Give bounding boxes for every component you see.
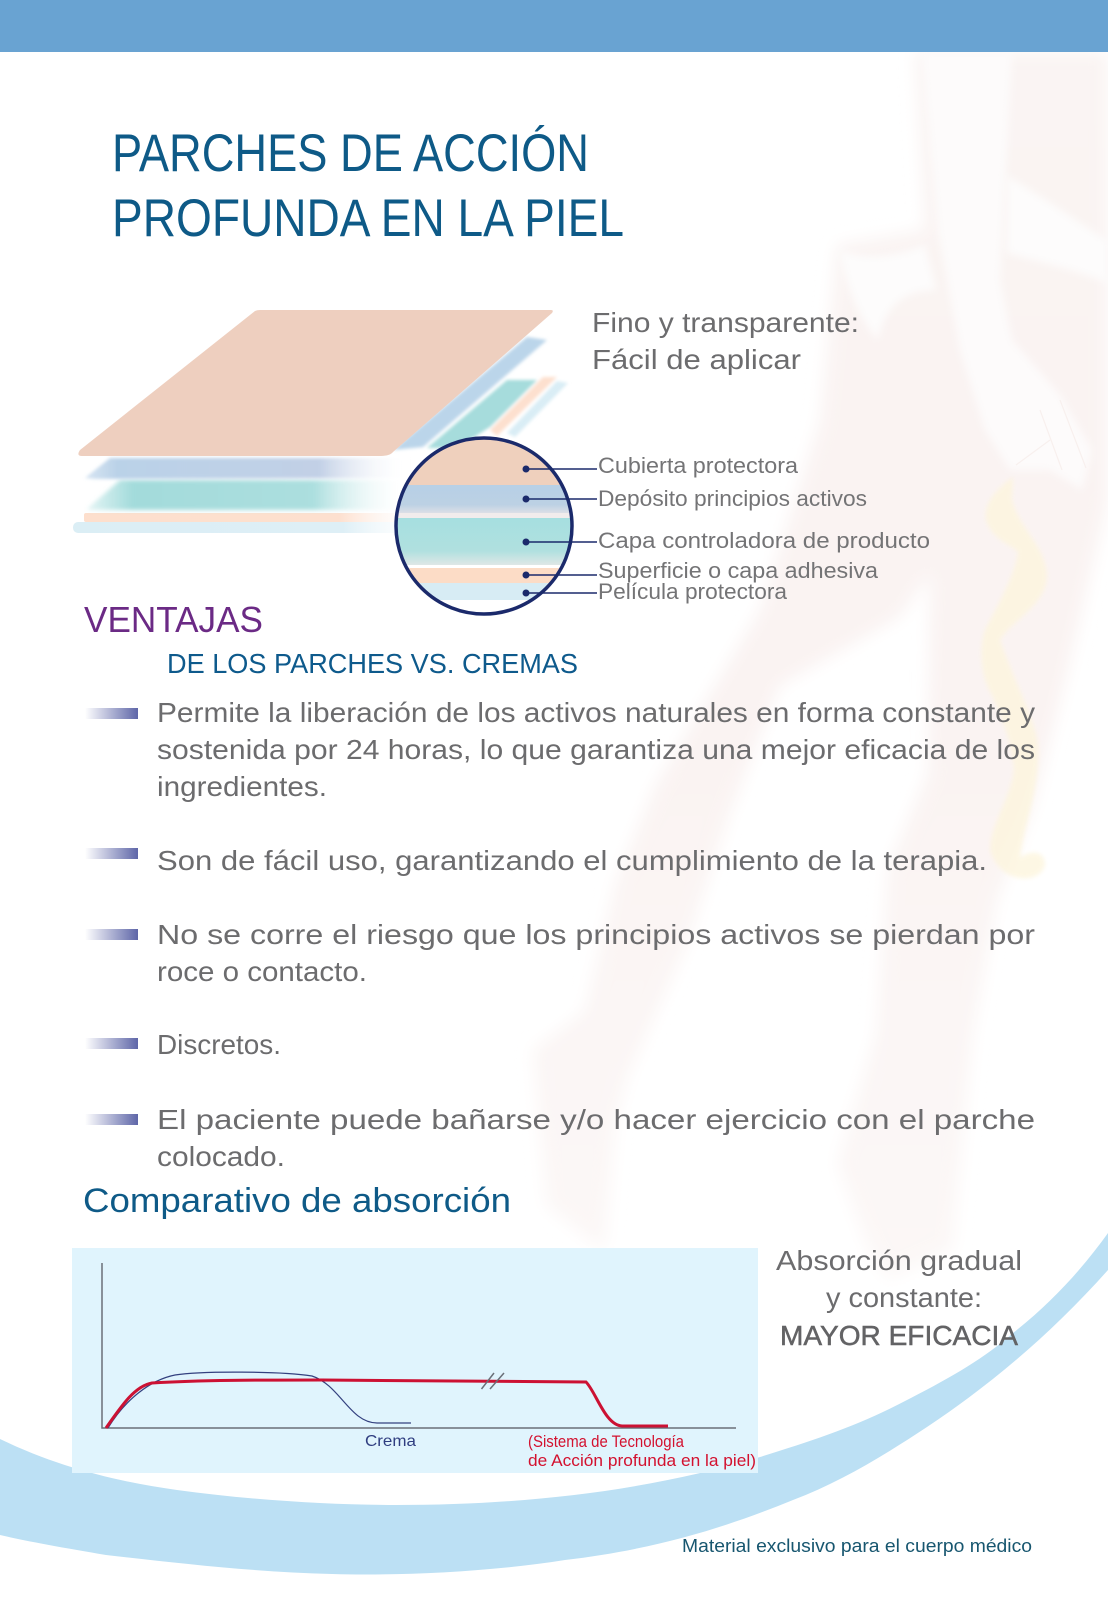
magnifier circle xyxy=(394,436,574,616)
advantage 3 xyxy=(85,919,1035,987)
light blue film layer xyxy=(73,522,433,533)
label: sistema xyxy=(528,1433,756,1470)
callout: película protectora: Película protectora xyxy=(598,579,788,604)
absorption callout: y constante: xyxy=(826,1282,982,1313)
advantage 5 xyxy=(85,1104,1035,1172)
patch feature text: Fácil de aplicar xyxy=(592,344,801,375)
advantage 5: El paciente puede bañarse y/o hacer ejercicio con el parche xyxy=(157,1104,1035,1135)
blue reservoir layer xyxy=(85,458,410,479)
diagonal edges of layers xyxy=(393,337,568,450)
background photo: faded legs xyxy=(533,52,1108,1279)
patch feature text xyxy=(592,307,859,375)
subheading: parches vs cremas: DE LOS PARCHES VS. CREMAS xyxy=(167,648,578,679)
top peach cover xyxy=(78,310,553,456)
peach adhesive layer xyxy=(84,513,424,522)
top bar xyxy=(0,0,1108,52)
callout: capa controladora: Capa controladora de producto xyxy=(598,528,930,553)
absorption callout xyxy=(776,1245,1022,1351)
underwear xyxy=(840,176,1108,340)
callout: depósito principios activos: Depósito principios activos xyxy=(598,486,867,511)
axes xyxy=(102,1263,736,1428)
patch layers illustration xyxy=(73,310,568,533)
footer note: Material exclusivo para el cuerpo médico xyxy=(682,1536,1032,1556)
title: PARCHES DE ACCIÓN xyxy=(112,124,589,183)
heading: ventajas: VENTAJAS xyxy=(84,599,263,640)
hand lines xyxy=(1016,400,1086,470)
curve: crema xyxy=(108,1372,411,1428)
label: sistema: de Acción profunda en la piel) xyxy=(528,1452,756,1470)
callout: película protectora xyxy=(522,579,788,604)
callout: cubierta protectora: Cubierta protectora xyxy=(598,453,799,478)
advantage 5: colocado. xyxy=(157,1141,285,1172)
patch feature text: Fino y transparente: xyxy=(592,307,859,338)
advantage 1: sostenida por 24 horas, lo que garantiza una mejor eficacia de los xyxy=(157,734,1035,765)
teal control layer xyxy=(88,480,410,510)
heading: comparativo de absorción: Comparativo de absorción xyxy=(83,1182,511,1220)
label: crema: Crema xyxy=(365,1433,416,1450)
advantage 3: No se corre el riesgo que los principios activos se pierdan por xyxy=(157,919,1035,950)
absorption callout: Absorción gradual xyxy=(776,1245,1022,1276)
advantage 1: Permite la liberación de los activos naturales en forma constante y xyxy=(157,697,1035,728)
advantage 4 xyxy=(85,1029,281,1060)
advantage 1 xyxy=(85,697,1035,802)
blue swoosh xyxy=(0,1233,1108,1574)
layer callouts with labels xyxy=(522,453,930,604)
axis break mark xyxy=(482,1373,504,1389)
chart panel xyxy=(72,1248,758,1473)
absorption callout: MAYOR EFICACIA xyxy=(780,1320,1018,1351)
absorption chart xyxy=(72,1248,758,1473)
title: PROFUNDA EN LA PIEL xyxy=(112,189,624,248)
arm xyxy=(922,52,1092,490)
advantages list xyxy=(85,697,1035,1172)
callout: cubierta protectora xyxy=(522,453,799,478)
callout: superficie adhesiva: Superficie o capa adhesiva xyxy=(598,558,879,583)
advantage 4: Discretos. xyxy=(157,1029,281,1060)
advantage 1: ingredientes. xyxy=(157,771,327,802)
yellow ribbon xyxy=(981,477,1047,879)
title xyxy=(112,124,624,248)
label: sistema: (Sistema de Tecnología xyxy=(528,1433,685,1451)
advantage 3: roce o contacto. xyxy=(157,956,367,987)
advantage 2: Son de fácil uso, garantizando el cumplimiento de la terapia. xyxy=(157,845,987,876)
curve: parche xyxy=(106,1380,668,1428)
